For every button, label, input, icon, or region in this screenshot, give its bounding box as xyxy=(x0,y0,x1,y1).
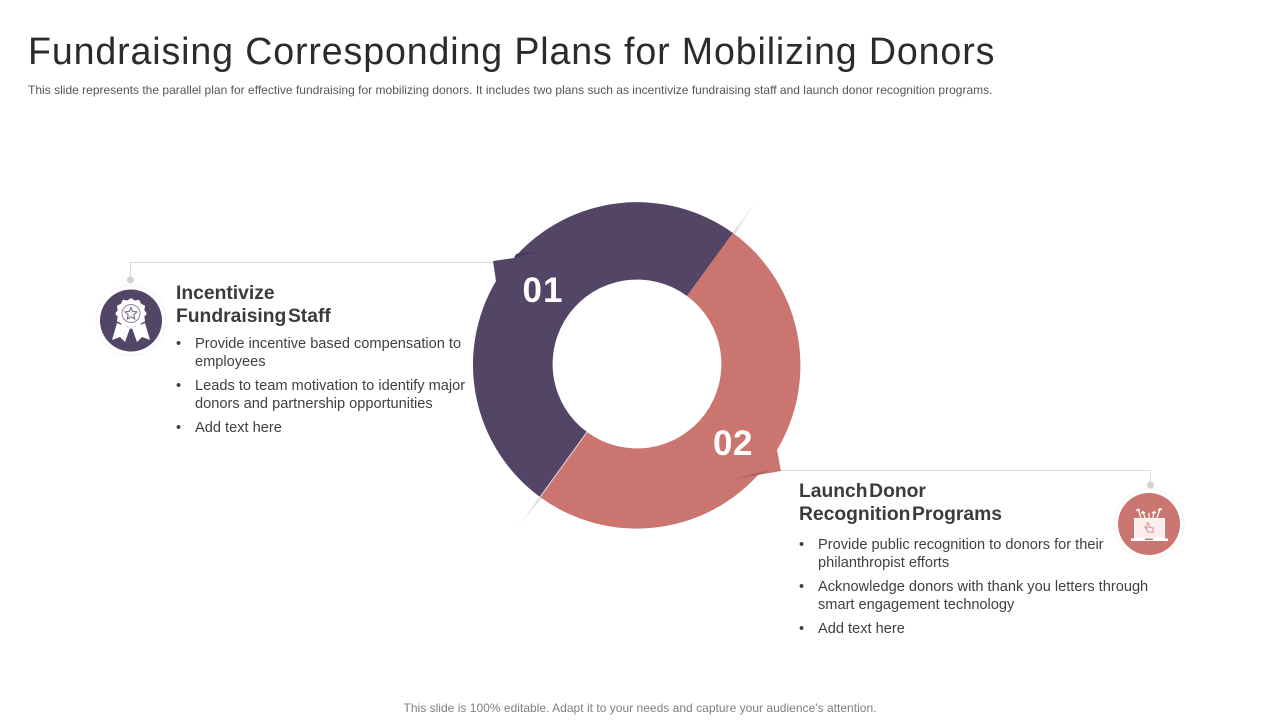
connector: staff plan xyxy=(127,262,494,284)
bullet list: staff plan: donors and partnership opportunities xyxy=(195,396,433,412)
subtitle: This slide represents the parallel plan for effective fundraising for mobilizing donors. It includes two plans such as incentivize fundraising staff and launch donor recognition programs. xyxy=(28,83,993,97)
heading: donor plan xyxy=(799,481,1002,525)
segment 01 purple xyxy=(473,202,733,497)
bullet list: donor plan: Acknowledge donors with thank you letters through xyxy=(818,579,1148,595)
heading: staff plan: Fundraising Staff xyxy=(176,306,331,327)
fold shadow 01 xyxy=(514,251,539,258)
fold shadow 02 xyxy=(733,470,770,479)
bullet list: staff plan: Add text here xyxy=(195,420,282,436)
heading: donor plan: Launch Donor xyxy=(799,481,926,502)
bullet list: donor plan: • xyxy=(799,621,804,637)
icon: laptop xyxy=(1114,489,1184,559)
bullet list: donor plan: philanthropist efforts xyxy=(818,555,949,571)
bullet list: staff plan: • xyxy=(176,336,181,352)
panel: launch donor recognition programs xyxy=(799,481,1148,637)
icon: award ribbon xyxy=(96,286,166,356)
bullet list: donor plan: Provide public recognition to donors for their xyxy=(818,537,1104,553)
bullet list: staff plan: • xyxy=(176,420,181,436)
bullet list: donor plan: • xyxy=(799,579,804,595)
connector: donor plan xyxy=(781,470,1154,488)
bullet list: staff plan: • xyxy=(176,378,181,394)
bullet list: staff plan: employees xyxy=(195,354,266,370)
bullet list: donor plan: Add text here xyxy=(818,621,905,637)
bullet list: staff plan: Provide incentive based compensation to xyxy=(195,336,461,352)
divider tick bottom xyxy=(514,497,542,532)
title: Fundraising Corresponding Plans for Mobilizing Donors xyxy=(28,30,995,72)
seam highlight xyxy=(540,432,587,497)
heading: staff plan: Incentivize xyxy=(176,283,275,304)
number 01: 01 xyxy=(523,271,563,310)
bullet list: staff plan xyxy=(176,336,465,436)
footer note: This slide is 100% editable. Adapt it to your needs and capture your audience's attention. xyxy=(403,701,877,715)
bullet list: staff plan: Leads to team motivation to identify major xyxy=(195,378,465,394)
heading: donor plan: Recognition Programs xyxy=(799,504,1002,525)
divider tick top xyxy=(732,196,760,234)
bullet list: donor plan xyxy=(799,537,1148,637)
bullet list: donor plan: • xyxy=(799,537,804,553)
number 02: 02 xyxy=(713,424,753,463)
panel: incentivize fundraising staff xyxy=(176,283,465,436)
bullet list: donor plan: smart engagement technology xyxy=(818,597,1014,613)
segment 02 coral xyxy=(540,233,800,529)
heading: staff plan xyxy=(176,283,331,327)
